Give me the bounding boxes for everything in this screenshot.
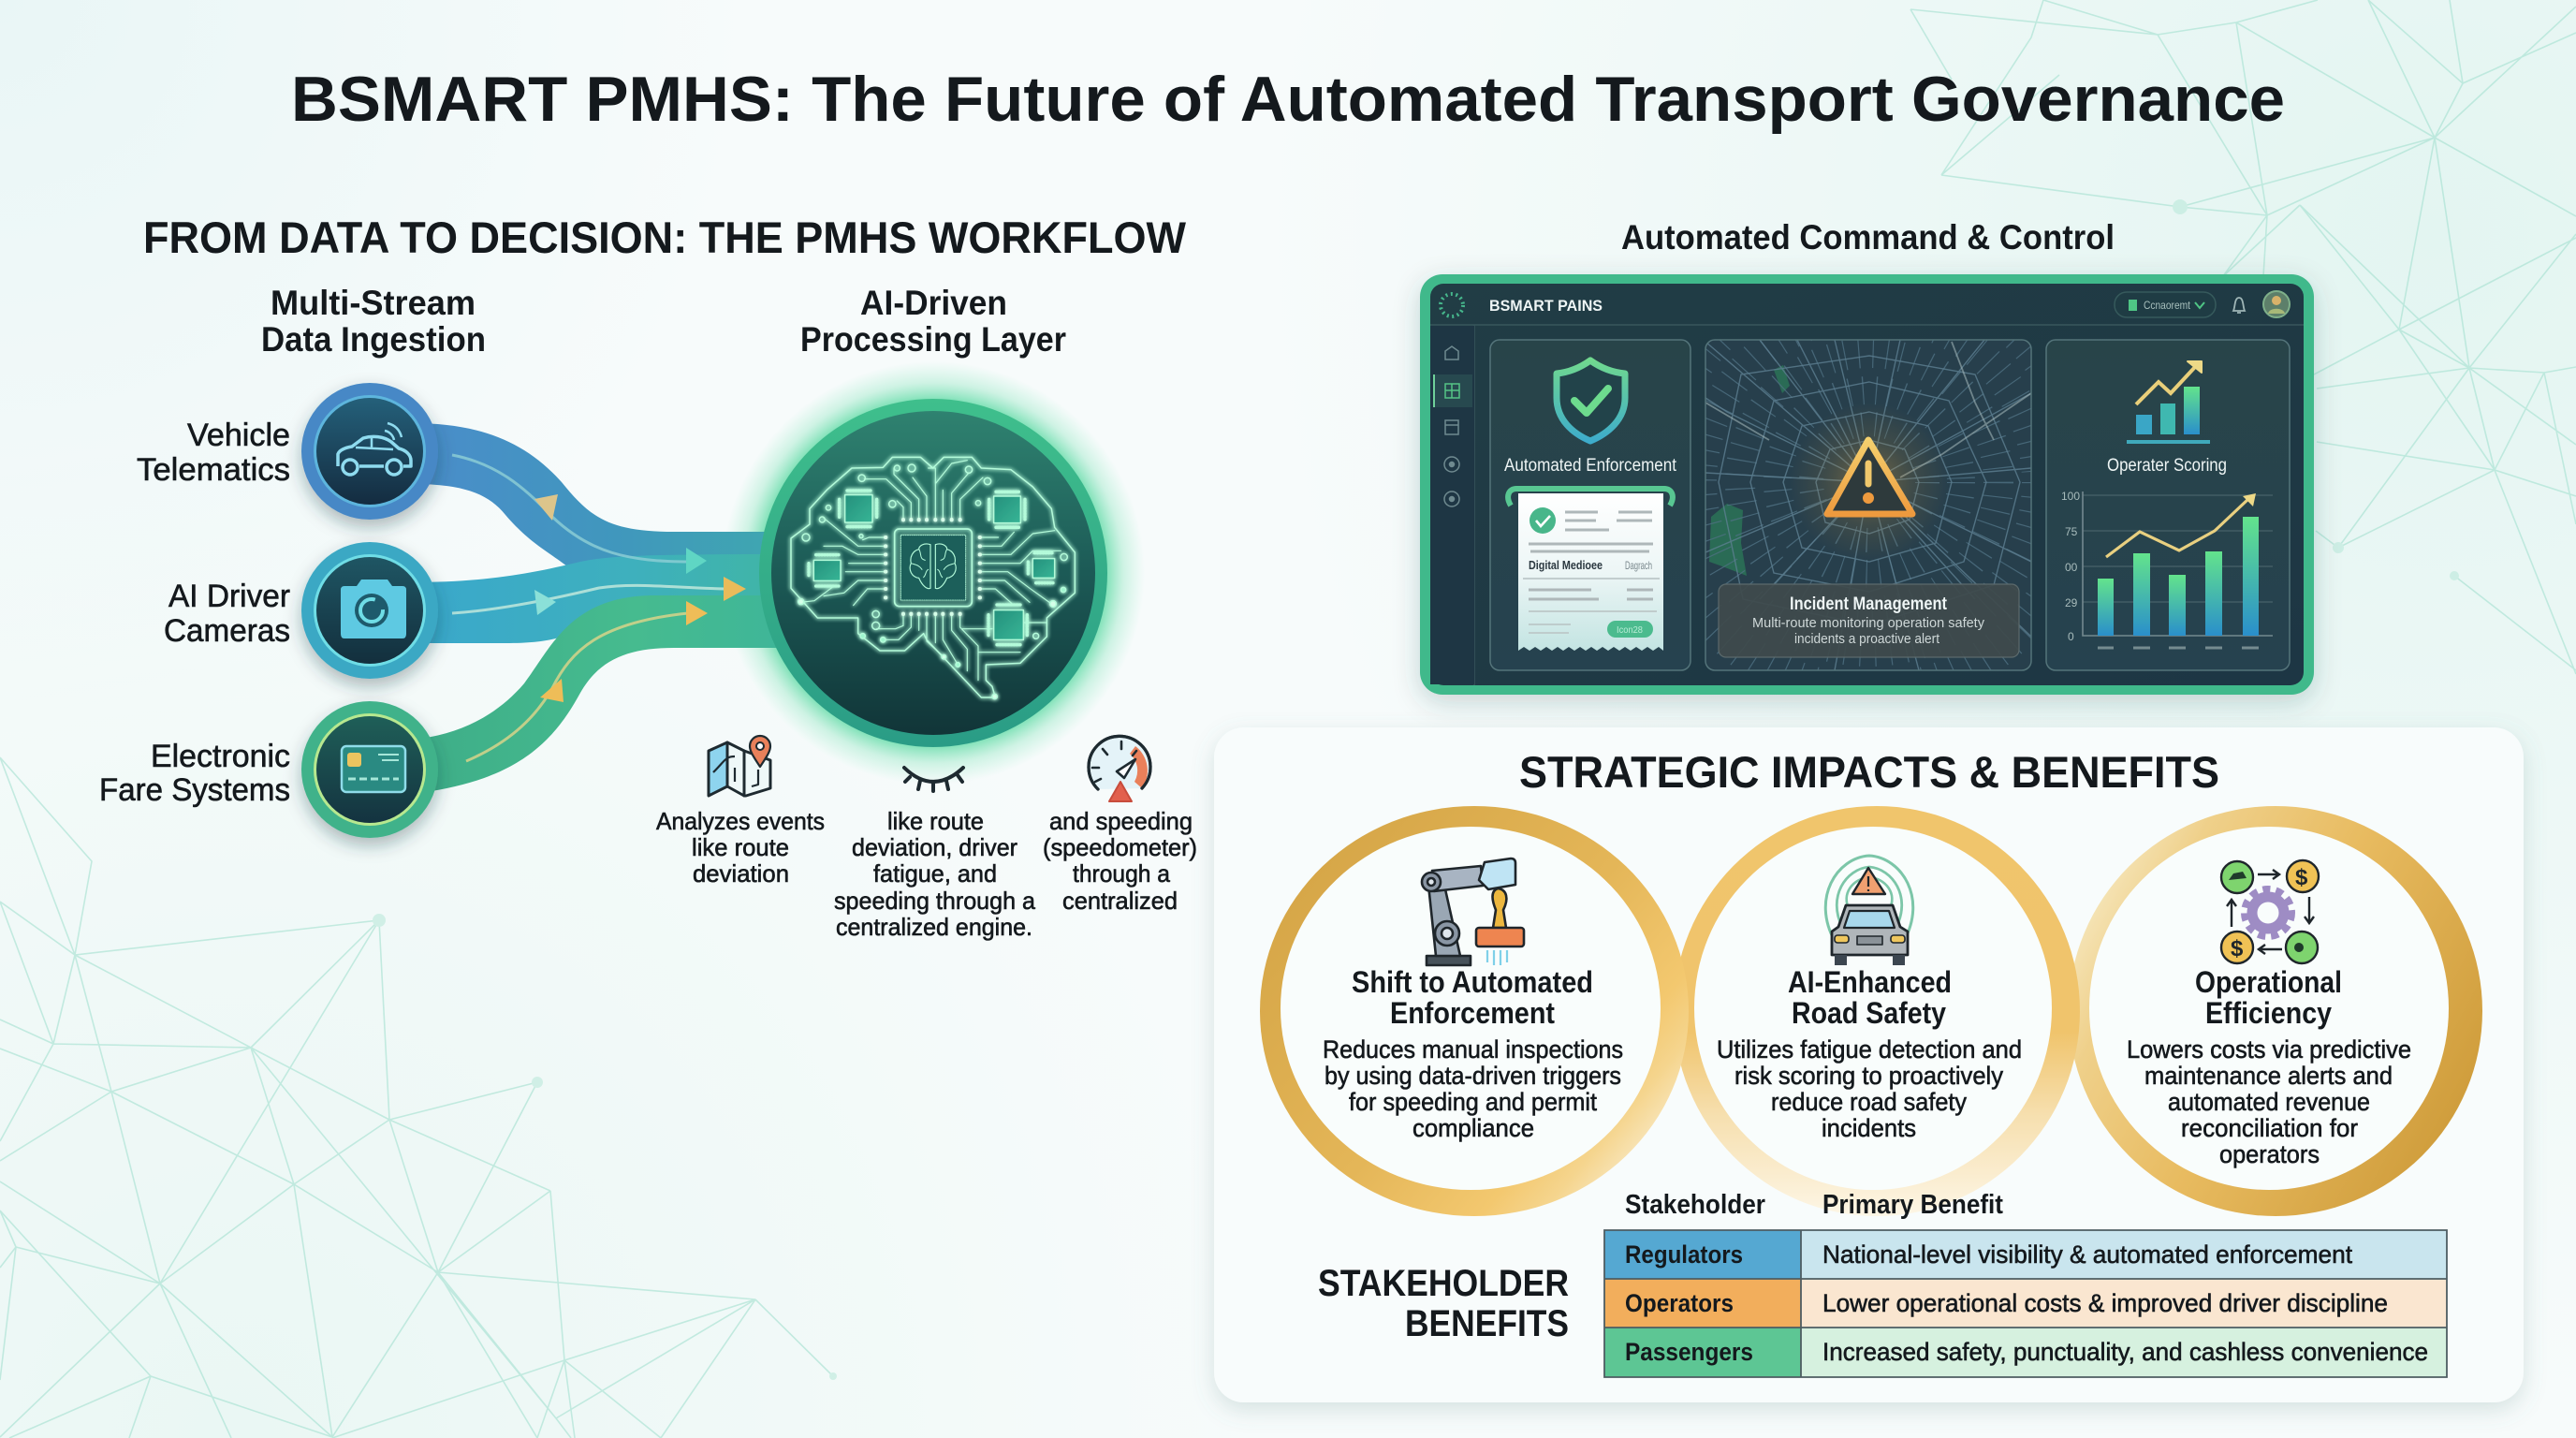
processing caption: speeding — [1043, 807, 1197, 915]
benefit: operational efficiency: automated revenue — [2168, 1088, 2370, 1116]
heading: multi-stream data ingestion: Data Ingestion — [261, 320, 486, 359]
label: electronic fare systems: Electronic — [151, 739, 290, 774]
bar chart — [2061, 490, 2273, 648]
icon: robot arm stamping — [1422, 858, 1524, 965]
AI processing brain circle — [759, 399, 1107, 747]
printer slot — [1508, 489, 1673, 506]
incident caption: Multi-route monitoring operation safety — [1752, 615, 1984, 631]
benefit: operational efficiency: Lowers costs via predictive — [2127, 1035, 2411, 1064]
icon: electronic fare card — [301, 701, 438, 838]
processing caption: speeding: through a — [1073, 859, 1171, 888]
panel: strategic impacts and benefits: $ — [2231, 936, 2244, 961]
processing caption: analyzes events: like route — [692, 833, 789, 861]
arrow: fare stream — [466, 601, 708, 761]
row: passengers: Increased safety, punctuality, and cashless convenience — [1822, 1338, 2428, 1366]
row: regulators: Regulators — [1625, 1240, 1743, 1269]
dashboard title: BSMART PAINS — [1489, 297, 1603, 315]
digital receipt: Digital Medioee — [1529, 558, 1603, 572]
processing caption: driver fatigue — [834, 807, 1036, 941]
dashboard panel — [1420, 271, 2314, 695]
circuit brain — [791, 457, 1075, 699]
panel: operator scoring — [2046, 340, 2290, 670]
bar chart: 75 — [2065, 525, 2078, 538]
row: operators: Operators — [1625, 1289, 1734, 1317]
benefit: AI-enhanced road safety: risk scoring to proactively — [1734, 1062, 2003, 1090]
digital receipt: Icon28 — [1617, 625, 1643, 636]
benefit: operational efficiency: operators — [2219, 1140, 2320, 1168]
processing caption: driver fatigue: speeding through a — [834, 887, 1036, 915]
background network: top right — [1910, 0, 2576, 674]
row: passengers — [1604, 1328, 2447, 1377]
benefit: shift to automated enforcement: by using data-driven triggers — [1325, 1062, 1621, 1090]
row: regulators: National-level visibility & automated enforcement — [1822, 1240, 2352, 1269]
icon: AI driver camera — [301, 542, 438, 679]
icon: vehicle telematics — [301, 383, 438, 520]
ring 2 — [1674, 806, 2080, 1216]
heading: stakeholder benefits: BENEFITS — [1405, 1303, 1569, 1344]
label: vehicle telematics: Telematics — [137, 452, 290, 488]
heading: strategic impacts: STRATEGIC IMPACTS & BENEFITS — [1519, 747, 2219, 797]
benefit: AI-enhanced road safety: AI-Enhanced — [1788, 965, 1952, 999]
benefit: AI-enhanced road safety — [1717, 965, 2022, 1142]
processing caption: driver fatigue: deviation, driver — [852, 833, 1017, 861]
processing caption: driver fatigue: fatigue, and — [873, 859, 997, 888]
icon: speedometer — [1089, 736, 1150, 801]
stakeholder table — [1604, 1190, 2447, 1377]
flow bands into processing layer — [412, 423, 782, 794]
heading: workflow: FROM DATA TO DECISION: THE PMHS WORKFLOW — [143, 213, 1187, 262]
benefit: shift to automated enforcement: for speeding and permit — [1349, 1088, 1597, 1116]
digital receipt — [1518, 493, 1663, 651]
row: passengers: Passengers — [1625, 1338, 1753, 1366]
benefit: shift to automated enforcement: Shift to Automated — [1352, 965, 1593, 999]
bar chart: 0 — [2068, 630, 2074, 643]
panel: strategic impacts and benefits — [1214, 727, 2524, 1402]
label: electronic fare systems: Fare Systems — [99, 772, 290, 808]
label: vehicle telematics: Vehicle — [187, 418, 290, 453]
table header — [1625, 1190, 2003, 1220]
processing caption: analyzes events: Analyzes events — [656, 807, 825, 835]
processing caption: analyzes events: deviation — [693, 859, 789, 888]
heading: automated command and control: Automated Command & Control — [1621, 218, 2115, 257]
heading: AI-driven processing layer: Processing Layer — [800, 320, 1066, 359]
bar chart: 100 — [2061, 490, 2080, 503]
label: AI driver cameras: Cameras — [164, 613, 290, 649]
label: AI driver cameras: AI Driver — [168, 579, 290, 614]
heading: multi-stream data ingestion — [261, 284, 486, 359]
bar chart: 29 — [2065, 596, 2078, 609]
row: regulators — [1604, 1230, 2447, 1279]
icon: avatar — [2263, 291, 2290, 317]
benefit: AI-enhanced road safety: Road Safety — [1792, 996, 1946, 1030]
icon: closed eye — [904, 768, 963, 791]
ring 3 — [2069, 806, 2482, 1216]
processing caption: speeding: (speedometer) — [1043, 833, 1197, 861]
benefit: AI-enhanced road safety: reduce road safety — [1771, 1088, 1967, 1116]
panel: incident management map — [1705, 339, 2032, 671]
brain glow — [722, 361, 1145, 785]
benefit: operational efficiency: Operational — [2195, 965, 2342, 999]
background network: bottom left — [0, 757, 837, 1438]
label: vehicle telematics — [137, 418, 290, 488]
processing caption: driver fatigue: centralized engine. — [836, 913, 1032, 941]
benefit: shift to automated enforcement: Reduces manual inspections — [1323, 1035, 1623, 1064]
icon: warning triangle — [1827, 440, 1912, 514]
heading: stakeholder benefits: STAKEHOLDER — [1318, 1263, 1569, 1304]
processing caption: analyzes events — [656, 807, 825, 888]
panel: strategic impacts and benefits: $ — [2295, 865, 2308, 890]
label: automated enforcement: Automated Enforcement — [1504, 456, 1677, 476]
heading: AI-driven processing layer — [800, 284, 1066, 359]
bar chart: 00 — [2065, 561, 2078, 574]
benefit: AI-enhanced road safety: incidents — [1822, 1114, 1916, 1142]
benefit: shift to automated enforcement — [1323, 965, 1623, 1142]
icon: bell — [2233, 298, 2245, 313]
panel: automated enforcement — [1490, 340, 1690, 670]
processing caption: speeding: centralized — [1062, 887, 1178, 915]
ring 1 — [1260, 806, 1689, 1216]
row: operators — [1604, 1279, 2447, 1328]
icon: operational cycle — [2221, 860, 2319, 963]
benefit: AI-enhanced road safety: Utilizes fatigue detection and — [1717, 1035, 2022, 1064]
table header: Primary Benefit — [1822, 1190, 2003, 1220]
processing caption: speeding: and speeding — [1049, 807, 1193, 835]
benefit: shift to automated enforcement: Enforcement — [1390, 996, 1555, 1030]
benefit: shift to automated enforcement: compliance — [1412, 1114, 1534, 1142]
benefit: operational efficiency: Efficiency — [2205, 996, 2332, 1030]
title: BSMART PMHS: The Future of Automated Transport Governance — [291, 64, 2285, 135]
incident caption — [1719, 584, 2019, 657]
heading: stakeholder benefits — [1318, 1263, 1569, 1344]
dashboard selector: Ccnaoremt — [2144, 299, 2191, 312]
icon: shield — [1557, 360, 1625, 441]
heading: AI-driven processing layer: AI-Driven — [860, 284, 1007, 322]
dashboard logo — [1441, 294, 1463, 316]
benefit: operational efficiency — [2127, 965, 2411, 1168]
benefit: operational efficiency: maintenance alerts and — [2144, 1062, 2393, 1090]
heading: multi-stream data ingestion: Multi-Stream — [271, 284, 476, 322]
incident caption: incidents a proactive alert — [1794, 631, 1940, 647]
row: operators: Lower operational costs & improved driver discipline — [1822, 1289, 2388, 1317]
benefit: operational efficiency: reconciliation for — [2181, 1114, 2358, 1142]
icon: car with alert — [1825, 856, 1913, 965]
icon: route map — [709, 736, 770, 796]
sidebar icons — [1434, 346, 1472, 506]
incident caption: Incident Management — [1790, 594, 1948, 614]
digital receipt: Dagrach — [1625, 559, 1652, 572]
icon: scoring chart — [2127, 361, 2210, 442]
label: AI driver cameras — [164, 579, 290, 649]
label: operator scoring: Operater Scoring — [2107, 456, 2227, 476]
table header: Stakeholder — [1625, 1190, 1765, 1220]
arrow: telematics stream — [452, 455, 707, 574]
label: electronic fare systems — [99, 739, 290, 808]
processing caption: driver fatigue: like route — [887, 807, 984, 835]
arrow: camera stream — [452, 577, 746, 615]
dashboard selector — [2115, 292, 2216, 317]
